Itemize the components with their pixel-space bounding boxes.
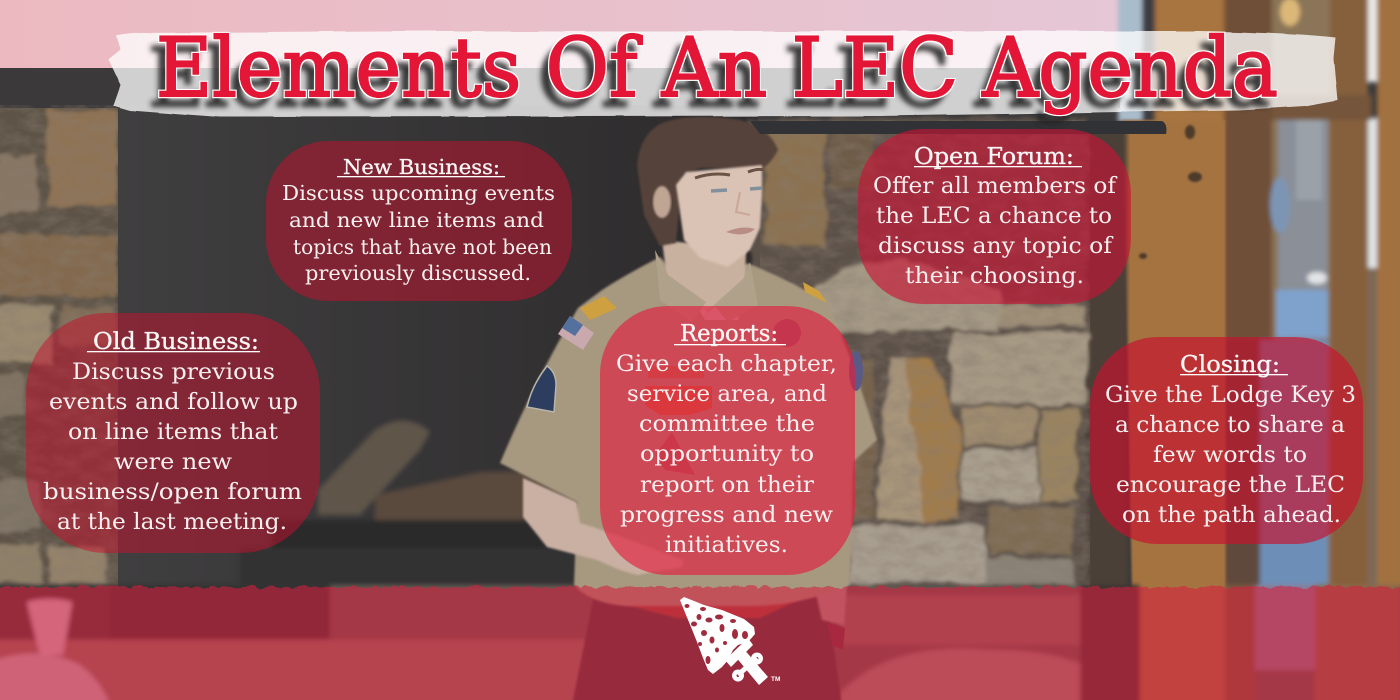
body text: at the last meeting. (57, 509, 287, 535)
mouth (726, 228, 755, 234)
panel: closing (1090, 337, 1363, 544)
right forearm (808, 545, 850, 625)
body text (282, 181, 555, 285)
body text: Discuss upcoming events (282, 181, 555, 205)
eyes (711, 188, 762, 191)
fireplace wall, left (0, 100, 120, 590)
chest badge (773, 319, 801, 347)
panel: reports (600, 306, 855, 575)
ear (653, 186, 671, 218)
heading underline (914, 166, 1082, 167)
bubble (26, 313, 320, 553)
body text: Discuss previous (72, 359, 275, 385)
body text: initiatives. (665, 532, 788, 558)
arrowhead (680, 597, 755, 674)
heading underline (87, 351, 260, 352)
bubble (858, 129, 1131, 304)
body text: encourage the LEC (1116, 472, 1345, 498)
body text: topics that have not been (293, 235, 552, 259)
heading underline (674, 344, 786, 345)
left arm and hand (523, 478, 683, 575)
body text (873, 173, 1118, 289)
shaft (735, 648, 768, 685)
body text: and new line items and (289, 208, 544, 232)
post shadow (1085, 125, 1127, 590)
pants (572, 590, 842, 700)
bubble (266, 141, 572, 301)
hearth and foreground (0, 585, 1400, 700)
belt (598, 585, 802, 618)
shirt (500, 257, 877, 606)
body text: opportunity to (640, 441, 814, 467)
trademark: TM (771, 676, 780, 683)
hair (637, 117, 778, 246)
black screen bar (750, 121, 1166, 134)
neck (662, 240, 746, 312)
body text: business/open forum (43, 479, 302, 505)
projector screen wall (0, 0, 1128, 70)
body text: Give the Lodge Key 3 (1105, 382, 1356, 408)
body text: were new (114, 449, 232, 475)
body text: previously discussed. (305, 261, 531, 285)
body text (43, 359, 302, 535)
fire logs and grate (240, 420, 580, 586)
undershirt (695, 285, 745, 320)
body text: Offer all members of (873, 173, 1118, 199)
speaker photo (500, 117, 877, 700)
body text: progress and new (620, 502, 833, 528)
stone mottling (0, 105, 1090, 585)
US flag patch (558, 316, 594, 350)
nose (736, 192, 750, 215)
right sleeve patch (849, 351, 863, 391)
body text: few words to (1153, 442, 1307, 468)
top dark band (0, 68, 1120, 108)
right collar (714, 262, 758, 322)
crossbar and loops (732, 652, 763, 682)
heading: Closing: (1180, 352, 1280, 378)
title banner (108, 31, 1338, 117)
body text: discuss any topic of (878, 233, 1114, 259)
body text: committee the (639, 411, 815, 437)
body text: service area, and (627, 381, 827, 407)
panel: old business (26, 313, 320, 553)
body text: report on their (640, 472, 814, 498)
council patch (527, 366, 556, 412)
body text: on line items that (68, 419, 278, 445)
heading underline (337, 176, 505, 177)
heading: Reports: (680, 321, 778, 347)
bubble (1090, 337, 1363, 544)
shirt cuff at pocket (827, 622, 845, 650)
bubble (600, 306, 855, 575)
panel: new business (266, 141, 572, 301)
epaulet left (580, 296, 617, 320)
body text: the LEC a chance to (876, 203, 1112, 229)
body text: events and follow up (49, 389, 298, 415)
wood knots (1139, 125, 1202, 259)
body text (1105, 382, 1356, 528)
fireplace wall, right (750, 118, 1088, 588)
panel: open forum (858, 129, 1131, 304)
face (676, 165, 762, 267)
epaulet right (803, 282, 827, 303)
icon: Order of the Arrow arrowhead logo (680, 597, 780, 685)
chest patches (645, 366, 712, 475)
left collar (655, 250, 706, 322)
torn red footer band (0, 587, 1400, 700)
arrowhead spots (684, 604, 748, 664)
wrap (725, 638, 753, 667)
heading underline (1180, 374, 1288, 375)
wooden post (1122, 120, 1225, 590)
fireplace opening (118, 105, 758, 587)
heading: Old Business: (93, 329, 259, 355)
body text (616, 351, 837, 558)
body text: on the path ahead. (1122, 502, 1341, 528)
body text: Give each chapter, (616, 351, 837, 377)
heading: New Business: (343, 155, 500, 179)
eyebrows (695, 169, 764, 178)
heading: Open Forum: (914, 144, 1074, 170)
wood posts and window (1118, 0, 1400, 590)
body text: their choosing. (905, 263, 1084, 289)
body text: a chance to share a (1115, 412, 1345, 438)
title: Elements Of An LEC Agenda (156, 22, 1278, 116)
